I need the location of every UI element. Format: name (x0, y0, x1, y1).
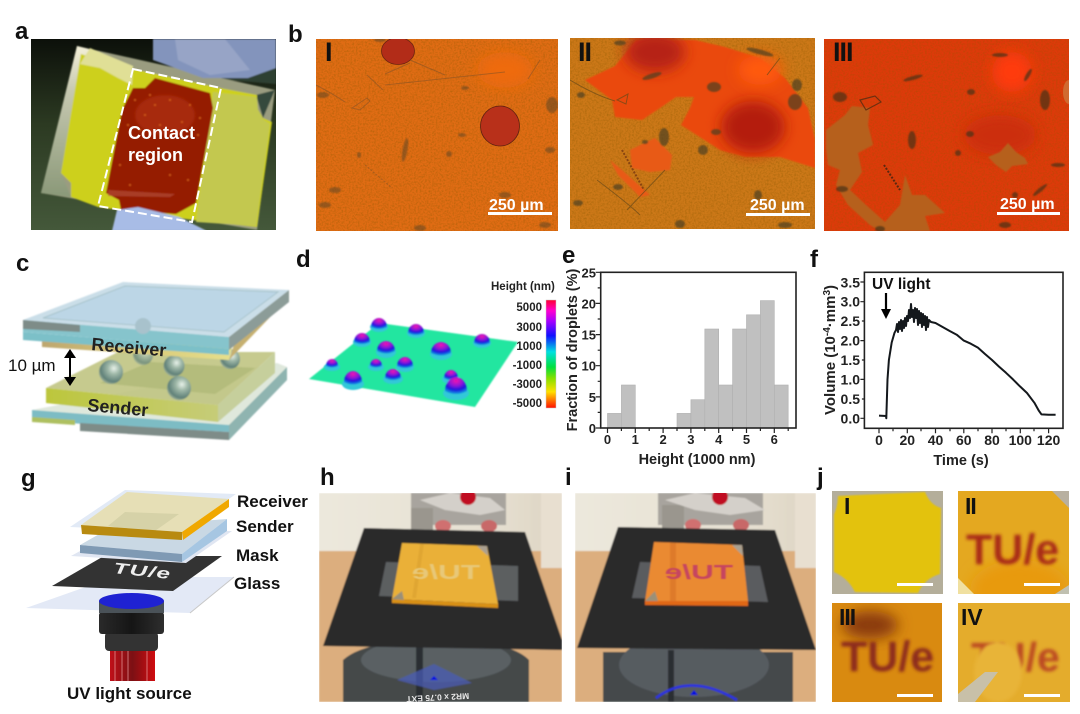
label III: III (833, 37, 853, 67)
panel a: contact region photo: region (128, 145, 183, 165)
panel label f: f (810, 246, 819, 273)
layer labels: Mask (236, 546, 279, 565)
height surface (309, 323, 518, 407)
label I: I (325, 37, 333, 67)
y tick labels: 0.0 (841, 410, 860, 426)
sender layer (46, 352, 275, 422)
tape (379, 562, 518, 601)
x tick labels: 0 (875, 432, 883, 448)
UV light label: UV light (872, 276, 931, 293)
y axis title: -4 (822, 327, 833, 336)
droplets (99, 345, 240, 400)
colour bar (546, 300, 556, 408)
layer labels: Receiver (237, 492, 308, 511)
mirrored TU/e mark: TU/e (412, 561, 480, 584)
y axis title: 3 (822, 290, 833, 296)
y axis title: Fraction of droplets (%) (565, 268, 581, 431)
mirrored TU/e mark: TU/e (665, 561, 733, 584)
label II: II (578, 37, 591, 67)
red wash (585, 40, 815, 168)
gloves (153, 39, 276, 78)
panel i: photo of sample after (575, 489, 816, 702)
gap label: 10 µm (8, 356, 56, 375)
contact region text: Contact (128, 123, 195, 143)
label III: III (839, 604, 855, 630)
panel label b: b (288, 21, 303, 48)
sender label: Sender (87, 395, 149, 420)
scale bar (1024, 583, 1060, 586)
panel j-IV: erased pattern: TU/e (971, 634, 1060, 680)
colour bar labels: 3000 (516, 322, 542, 334)
panel label e: e (562, 242, 575, 269)
scale bar: 250 µm (1000, 196, 1055, 213)
y axis title: ) (822, 285, 839, 290)
panel b-II: micrograph (570, 32, 815, 229)
panel f: volume over time chart (822, 272, 1063, 469)
panel j-IV: erased pattern (958, 603, 1070, 702)
sample (645, 542, 748, 601)
red contact area (106, 78, 213, 214)
x tick labels: 5 (743, 432, 750, 447)
UV light source (99, 593, 164, 681)
panel j-III: pattern (832, 603, 942, 702)
x axis title: Height (1000 nm) (639, 452, 756, 468)
y tick labels: 1.0 (841, 372, 860, 388)
plot frame (601, 272, 796, 428)
y tick labels: 2.5 (841, 313, 860, 329)
y tick labels (841, 274, 860, 426)
x tick labels: 20 (900, 432, 915, 448)
UV light source label: UV light source (67, 684, 192, 703)
colour bar labels: -1000 (513, 360, 542, 372)
x tick labels (604, 432, 778, 447)
sample (392, 543, 498, 604)
ticks (596, 272, 788, 433)
panel b-I: micrograph (316, 37, 558, 231)
panel label g: g (21, 465, 36, 492)
panel j-II: pattern (958, 491, 1069, 594)
y tick labels: 0 (589, 421, 596, 436)
scale bar: 250 µm (489, 197, 544, 214)
x tick labels: 3 (687, 432, 695, 447)
arrow: gap (64, 349, 76, 386)
colour bar labels: -3000 (513, 379, 542, 391)
y tick labels: 15 (582, 328, 596, 342)
receiver stack (70, 490, 236, 540)
panel label c: c (16, 250, 29, 277)
bars (608, 301, 788, 428)
layer labels (234, 492, 308, 593)
panel g: exposure setup schematic (26, 490, 308, 703)
panel label h: h (320, 464, 335, 491)
receiver label: Receiver (91, 334, 167, 361)
y axis title: Volume (10 (822, 336, 839, 415)
x tick labels: 2 (659, 432, 667, 447)
ticks (860, 282, 1049, 433)
panel c: receiver and sender schematic (23, 282, 289, 440)
yellow film (61, 54, 272, 227)
apparatus (411, 493, 506, 525)
x tick labels: 80 (984, 432, 1000, 448)
panel a: contact region photo (31, 39, 276, 231)
microscope stage (603, 652, 793, 702)
black paper (323, 528, 562, 650)
y tick labels (582, 266, 596, 436)
y axis title: ·mm (822, 296, 839, 327)
scale bar (897, 583, 933, 586)
lens engraving: MR2 x 0.75 EXT (405, 691, 469, 704)
panel label i: i (565, 464, 572, 491)
y tick labels: 2.0 (841, 332, 860, 348)
sender stack (71, 519, 232, 563)
colour bar labels: -5000 (513, 398, 542, 410)
colour bar labels: 5000 (516, 302, 542, 314)
colour bar labels: 1000 (516, 341, 542, 353)
panel d: 3D height map (309, 281, 556, 410)
panel j-I: clean film (832, 491, 943, 594)
layer labels: Glass (234, 574, 280, 593)
y tick labels: 0.5 (841, 391, 860, 407)
label II: II (965, 493, 976, 519)
panel label a: a (15, 18, 29, 45)
panel h: photo of sample before (319, 489, 562, 704)
panel j-III: pattern: TU/e (841, 633, 934, 681)
scale bar (1024, 694, 1060, 697)
x tick labels (875, 432, 1060, 448)
panel e: height histogram (565, 266, 796, 468)
volume curve (879, 304, 1056, 418)
black paper (577, 527, 816, 650)
glass slide (41, 46, 275, 230)
x axis title: Time (s) (933, 453, 989, 469)
arrow: UV light on (881, 293, 891, 319)
layer labels: Sender (236, 517, 294, 536)
scale bar (897, 694, 933, 697)
label I: I (844, 493, 850, 519)
droplets (324, 318, 491, 400)
mask with logo: TU/e (113, 560, 172, 583)
panel label d: d (296, 246, 311, 273)
colour bar labels (513, 302, 542, 410)
brown branch residue (826, 106, 945, 231)
panel label j: j (816, 464, 824, 491)
y tick labels: 10 (582, 358, 596, 374)
y tick labels: 1.5 (841, 352, 860, 368)
plot frame (864, 272, 1063, 428)
mask with logo (52, 556, 222, 591)
scale bar: 250 µm (750, 197, 805, 214)
y tick labels: 20 (582, 296, 596, 312)
y tick labels: 25 (582, 266, 596, 280)
x tick labels: 120 (1037, 432, 1060, 448)
x tick labels: 0 (604, 432, 611, 447)
droplets (382, 38, 414, 64)
microscope stage (343, 640, 529, 702)
panel j-II: pattern: TU/e (966, 526, 1059, 574)
apparatus (658, 493, 763, 525)
x tick labels: 4 (715, 432, 723, 447)
x tick labels: 60 (956, 432, 972, 448)
tape (632, 562, 768, 602)
receiver layer (42, 305, 275, 360)
legend title: Height (nm) (491, 281, 555, 293)
dashed contact outline (98, 69, 221, 222)
x tick labels: 6 (771, 432, 778, 447)
y tick labels: 3.0 (841, 294, 860, 310)
glass sheet (26, 577, 234, 613)
panel b-III: micrograph (824, 37, 1075, 232)
top glass (23, 282, 289, 355)
x tick labels: 1 (632, 432, 639, 447)
bottom glass (32, 363, 287, 440)
y tick labels: 3.5 (841, 274, 860, 290)
y tick labels: 5 (589, 390, 596, 405)
x tick labels: 40 (928, 432, 943, 448)
x tick labels: 100 (1009, 432, 1032, 448)
label IV: IV (961, 604, 983, 630)
